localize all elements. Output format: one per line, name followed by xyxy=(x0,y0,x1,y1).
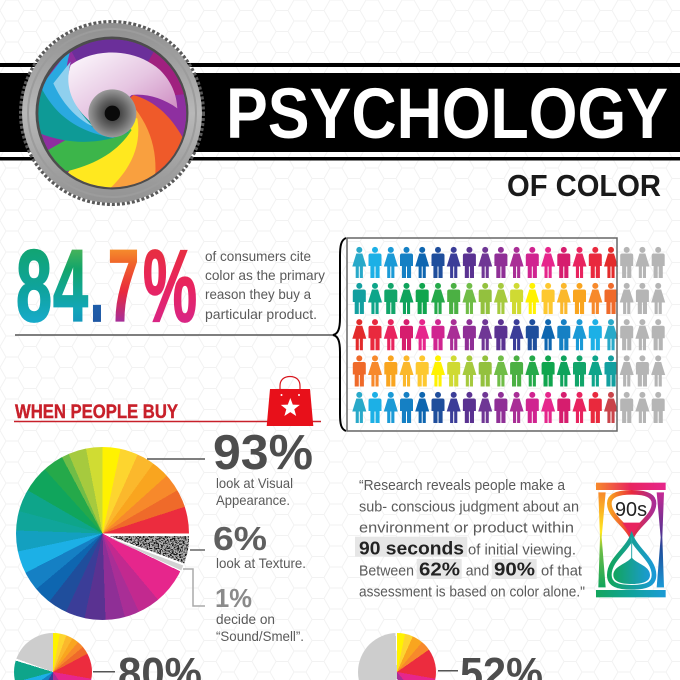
stat: 1 percent: 1% xyxy=(215,583,252,613)
headline statistic 84.7% xyxy=(16,229,197,343)
quote text block: Between xyxy=(359,564,414,580)
hourglass label: 90s xyxy=(615,499,647,521)
quote text block xyxy=(355,478,585,601)
row 1 xyxy=(352,247,665,278)
pie chart: visual, texture, sound xyxy=(16,447,189,620)
headline statistic 84.7%: 7 xyxy=(108,229,139,343)
text: consumers statement: of consumers cite xyxy=(205,248,311,264)
headline statistic 84.7%: % xyxy=(143,229,197,343)
stat: 93 percent xyxy=(147,426,313,508)
stat: 1 percent xyxy=(183,569,304,644)
headline statistic 84.7%: 8 xyxy=(16,229,52,343)
stat: 1 percent: “Sound/Smell”. xyxy=(216,628,304,644)
quote text block: of that xyxy=(541,564,582,580)
quote text block: 62% xyxy=(419,560,460,580)
stat: 6 percent xyxy=(190,520,306,571)
stat: 6 percent: 6% xyxy=(213,520,267,557)
quote text block: 90% xyxy=(494,560,535,580)
row 3 xyxy=(352,319,665,350)
text: consumers statement xyxy=(205,248,325,322)
title banner xyxy=(0,63,680,160)
stat: 6 percent: look at Texture. xyxy=(216,555,306,571)
stat: 1 percent: decide on xyxy=(216,611,275,627)
row 4 xyxy=(353,355,665,386)
small pie: 52 percent xyxy=(358,633,436,680)
text: consumers statement: particular product. xyxy=(205,306,317,322)
quote text block: environment or product within xyxy=(359,521,574,537)
quote text block: of initial viewing. xyxy=(468,542,576,558)
sound wedge xyxy=(109,537,183,570)
subtitle: OF COLOR xyxy=(507,168,661,203)
stat: 93 percent: look at Visual xyxy=(216,475,293,491)
headline statistic 84.7%: 4 xyxy=(53,229,88,343)
quote text block: “Research reveals people make a xyxy=(359,478,566,494)
stat: 93 percent: Appearance. xyxy=(216,492,290,508)
quote text block: 90 seconds xyxy=(359,538,464,558)
quote text block: and xyxy=(466,564,489,580)
quote text block: assessment is based on color alone." xyxy=(359,585,585,601)
stat: 93 percent: 93% xyxy=(213,426,313,480)
people chart: 84.7 percent coloured xyxy=(347,238,665,431)
row 2 xyxy=(353,283,665,314)
icon: hourglass 90s xyxy=(596,483,666,597)
texture wedge xyxy=(110,536,189,564)
quote text block: sub- conscious judgment about an xyxy=(359,500,579,516)
text: consumers statement: reason they buy a xyxy=(205,286,311,302)
small pie: 80 percent xyxy=(14,633,92,680)
icon: camera lens xyxy=(19,20,205,206)
row 5 xyxy=(352,392,665,423)
divider with brace xyxy=(15,238,346,431)
text: consumers statement: color as the primary xyxy=(205,267,325,283)
headline statistic 84.7%: . xyxy=(90,229,104,343)
icon: shopping bag xyxy=(267,376,313,426)
heading: when people buy: WHEN PEOPLE BUY xyxy=(15,402,178,423)
